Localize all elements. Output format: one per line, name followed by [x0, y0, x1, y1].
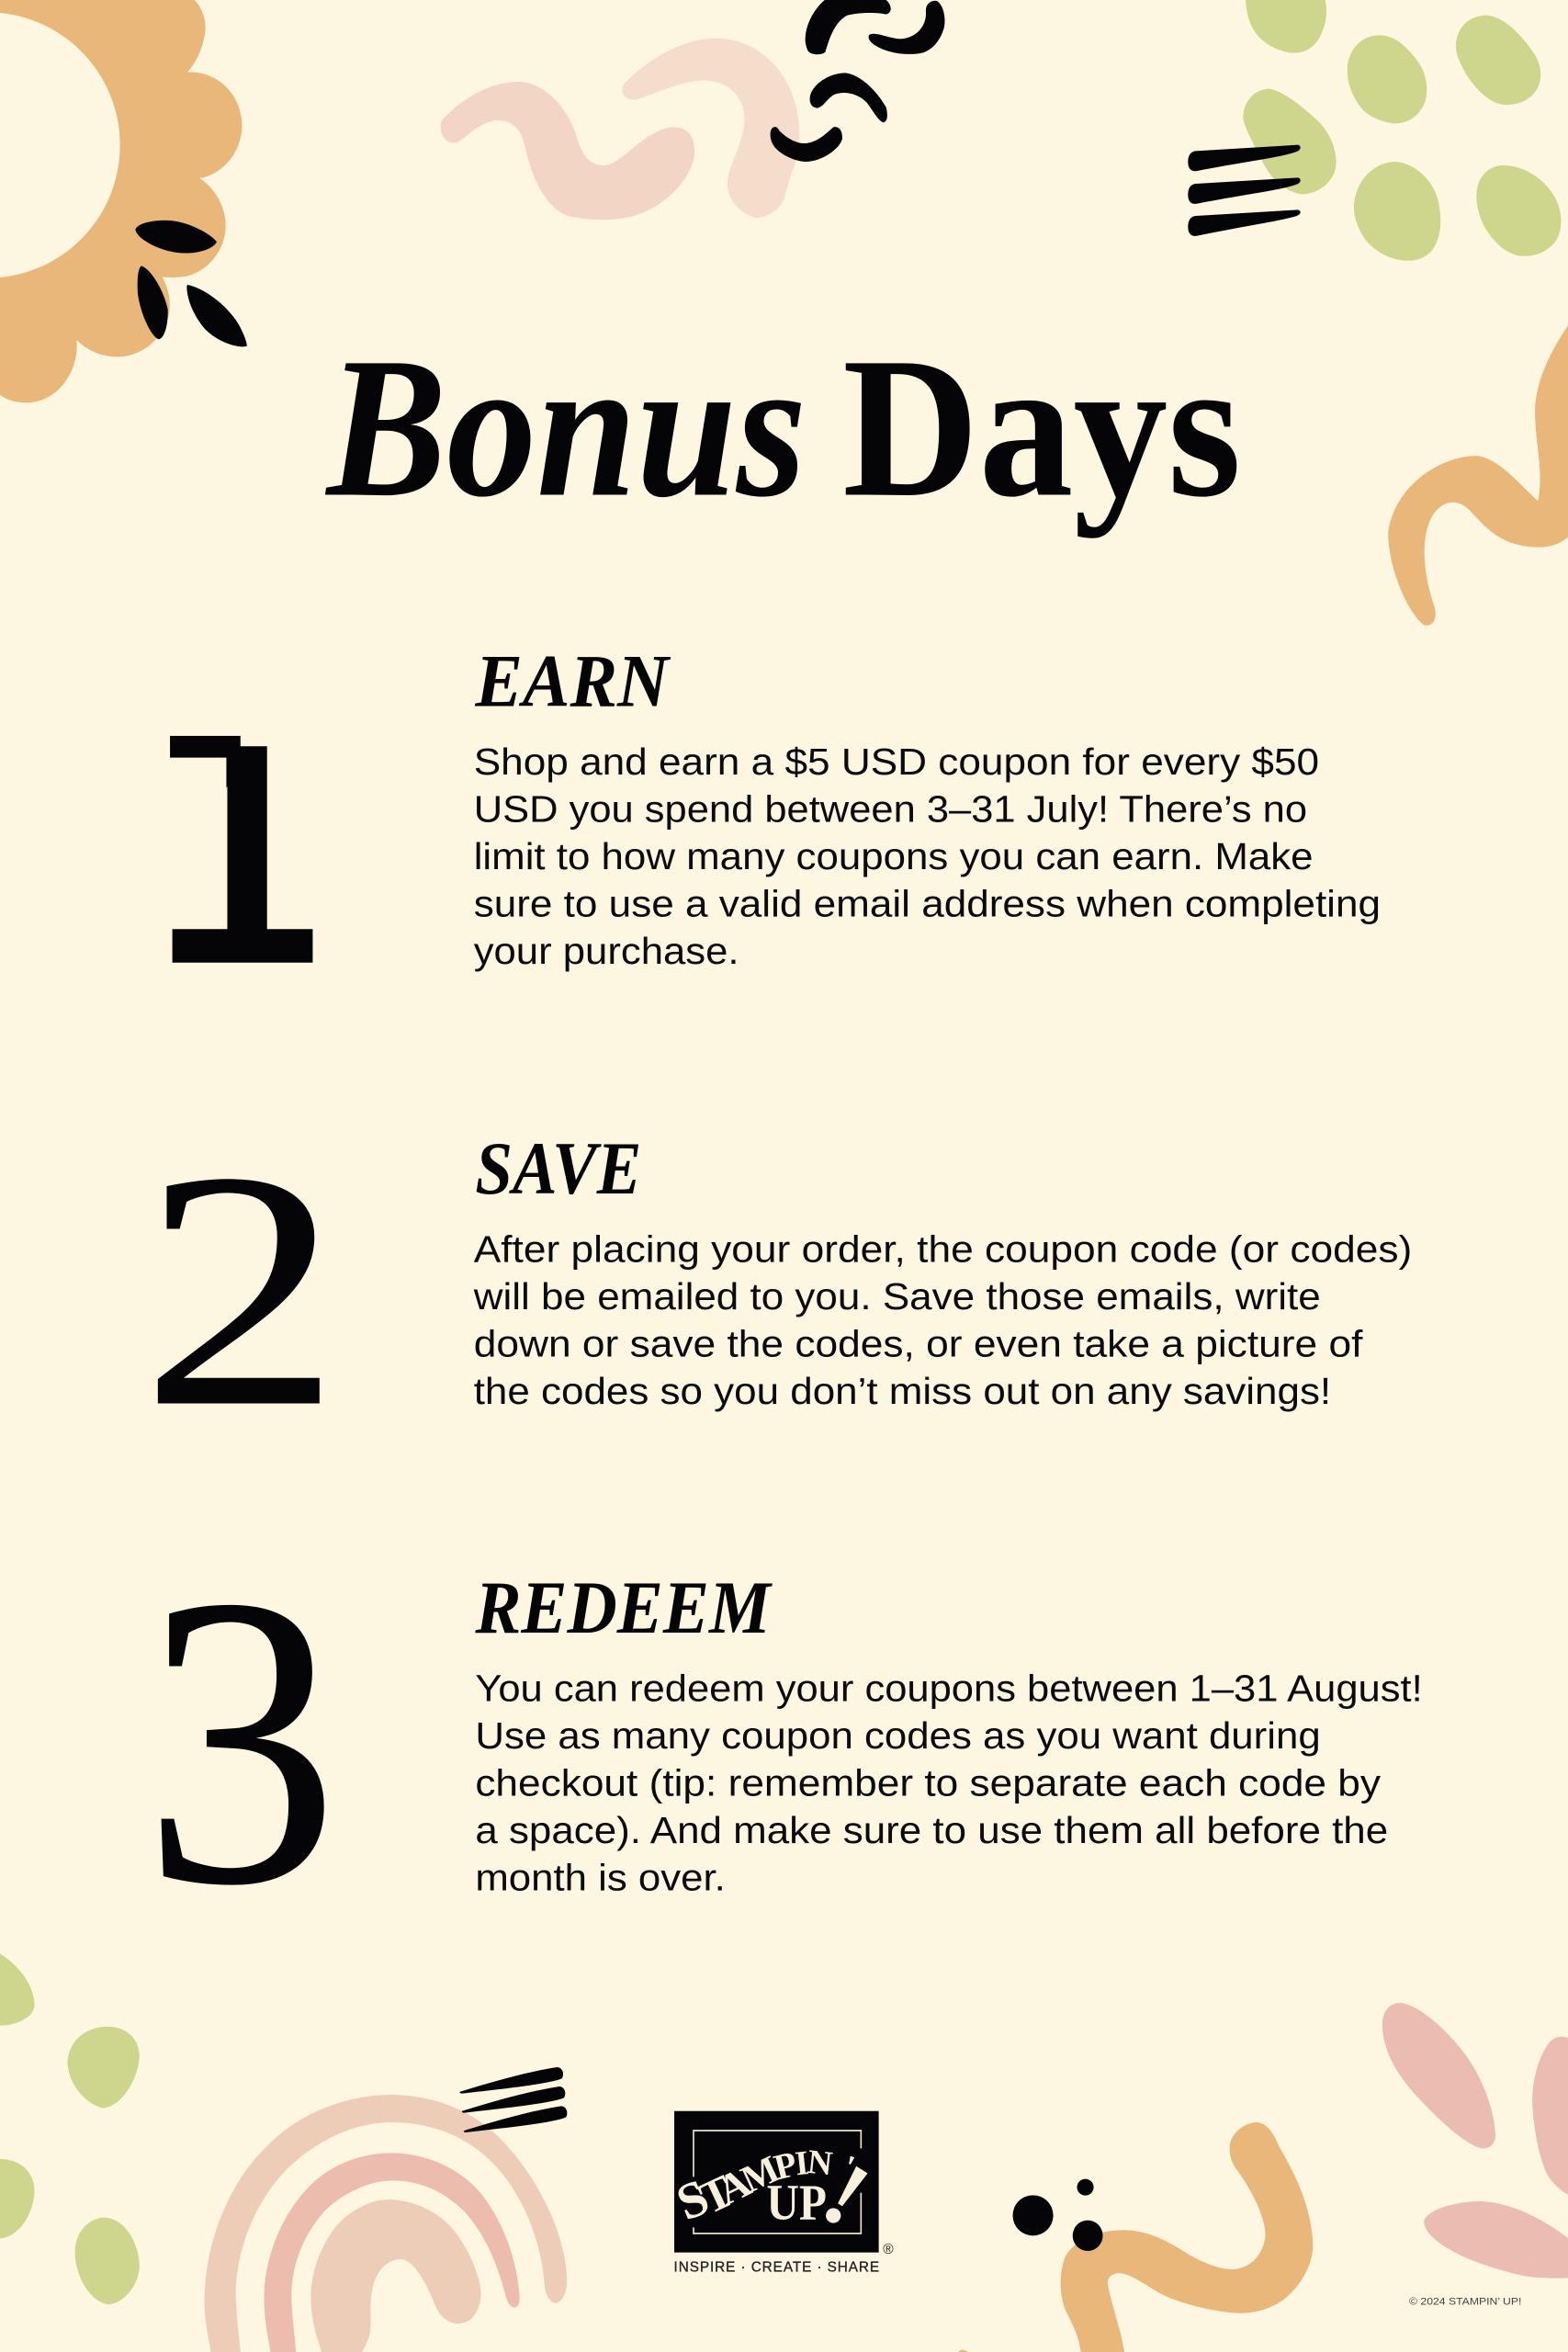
heading: save: SAVE: [475, 1126, 641, 1210]
logo wordmark: ': [838, 2147, 860, 2186]
text block: save: the codes so you don’t miss out on any savings!: [474, 1370, 1331, 1412]
text block: redeem: Use as many coupon codes as you want during: [475, 1714, 1321, 1757]
number 2: 2: [141, 1102, 342, 1477]
text block: earn: USD you spend between 3–31 July! There’s no: [474, 788, 1307, 831]
text block: save: will be emailed to you. Save those emails, write: [473, 1275, 1321, 1317]
heading: redeem: REDEEM: [474, 1566, 773, 1649]
text block: earn: sure to use a valid email address when completing: [474, 882, 1381, 924]
tagline: INSPIRE · CREATE · SHARE: [674, 2259, 879, 2275]
step 2: save: [141, 1102, 1412, 1477]
number 3: 3: [142, 1510, 339, 1972]
logo wordmark: P: [770, 2143, 801, 2188]
title: [324, 317, 1241, 539]
logo: Stampin' Up!: [669, 2111, 894, 2275]
icon: black leaves: [135, 220, 247, 346]
icon: black squiggles: [771, 0, 944, 162]
heading: earn: EARN: [474, 639, 671, 723]
decoration: orange squiggle bottom: [958, 2003, 1568, 2352]
decoration: rainbow: [204, 2067, 567, 2352]
text block: redeem: [475, 1668, 1423, 1898]
text block: save: [473, 1228, 1412, 1412]
text block: redeem: You can redeem your coupons between 1–31 August!: [475, 1668, 1423, 1710]
text block: earn: your purchase.: [474, 930, 739, 972]
text block: earn: Shop and earn a $5 USD coupon for every $50: [474, 741, 1319, 783]
decoration: orange wave right: [1388, 325, 1568, 626]
logo wordmark: S: [669, 2168, 716, 2232]
text block: save: down or save the codes, or even take a picture of: [474, 1322, 1363, 1364]
logo box: [674, 2111, 879, 2253]
text block: redeem: a space). And make sure to use them all before the: [475, 1809, 1388, 1851]
title: Bonus: [324, 317, 807, 539]
logo wordmark: I: [794, 2144, 810, 2183]
step 1: earn: [150, 639, 1381, 1062]
logo wordmark: N: [806, 2143, 834, 2183]
decoration: pink petals right: [1382, 2003, 1568, 2278]
icon: black stripes top right: [1188, 145, 1301, 236]
logo wordmark: A: [710, 2158, 758, 2214]
logo wordmark: T: [692, 2165, 741, 2224]
logo wordmark: !: [807, 2143, 886, 2246]
title: Days: [842, 317, 1241, 539]
copyright: © 2024 STAMPIN’ UP!: [1409, 2296, 1521, 2307]
logo wordmark: [669, 2131, 886, 2246]
decoration: green blobs top right: [1188, 0, 1561, 261]
decoration: green blobs bottom left: [0, 1953, 140, 2304]
logo wordmark: M: [735, 2148, 785, 2201]
registered mark: ®: [883, 2242, 894, 2257]
icon: black dots: [1013, 2179, 1103, 2251]
logo wordmark: UP: [766, 2174, 827, 2230]
icon: black stripes bottom left: [460, 2067, 567, 2132]
text block: redeem: checkout (tip: remember to separate each code by: [475, 1762, 1381, 1804]
text block: earn: [474, 741, 1381, 972]
step 3: redeem: [142, 1510, 1423, 1972]
text block: earn: limit to how many coupons you can earn. Make: [474, 835, 1314, 877]
decoration: orange flower top left: [0, 0, 247, 402]
text block: save: After placing your order, the coupon code (or codes): [474, 1228, 1412, 1271]
number 1: 1: [152, 690, 325, 1062]
decoration: pink wave: [441, 0, 944, 220]
text block: redeem: month is over.: [475, 1856, 726, 1898]
